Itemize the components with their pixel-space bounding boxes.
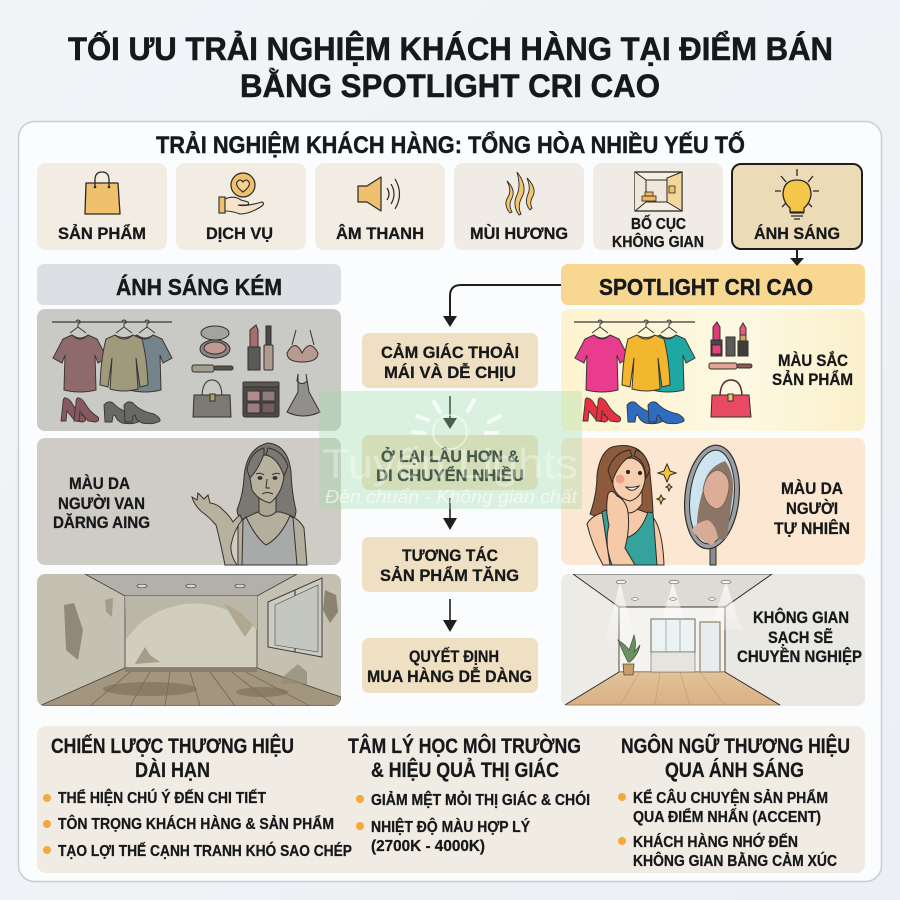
arrow: step 1 to 2	[443, 396, 457, 429]
illustration: tired woman	[192, 443, 307, 565]
tile: scent: MÙI HƯƠNG	[470, 224, 568, 243]
column: brand language: KHÁCH HÀNG NHỚ ĐẾN	[633, 832, 798, 851]
watermark: Tuyến Lights	[322, 440, 578, 487]
column: long-term brand strategy: CHIẾN LƯỢC THƯƠNG HIỆU	[51, 734, 294, 758]
flow step 1: CẢM GIÁC THOẢI	[381, 343, 519, 362]
tile: lighting (selected): ÁNH SÁNG	[754, 224, 840, 243]
tile: product	[37, 163, 167, 250]
column: environmental psychology	[348, 734, 590, 855]
tile: sound	[315, 163, 445, 250]
flow step 4: QUYẾT ĐỊNH	[409, 647, 499, 666]
panel: poor light products	[37, 309, 341, 431]
heading: customer experience: TRẢI NGHIỆM KHÁCH HÀNG: TỔNG HÒA NHIỀU YẾU TỐ	[156, 130, 745, 159]
tile: layout: KHÔNG GIAN	[612, 233, 704, 251]
tile: service: DỊCH VỤ	[206, 224, 273, 243]
column: environmental psychology: & HIỆU QUẢ THỊ GIÁC	[371, 758, 559, 782]
column: brand language: KHÔNG GIAN BẰNG CẢM XÚC	[633, 851, 837, 870]
arrow: lighting to spotlight	[790, 250, 804, 266]
flow step 2	[362, 435, 538, 490]
tile: scent	[454, 163, 584, 250]
panel: vivid products	[561, 309, 865, 431]
column: long-term brand strategy: THỂ HIỆN CHÚ Ý ĐẾN CHI TIẾT	[58, 788, 266, 807]
flow step 4	[362, 638, 538, 693]
panel: clean room	[561, 574, 865, 706]
tile: service	[176, 163, 306, 250]
title	[68, 31, 833, 104]
arrow: spotlight to flow	[443, 285, 561, 327]
column: long-term brand strategy: DÀI HẠN	[135, 759, 210, 782]
watermark: Đèn chuẩn - Không gian chất	[325, 487, 578, 507]
flow step 3: TƯƠNG TÁC	[402, 546, 498, 565]
flow step 4: MUA HÀNG DỄ DÀNG	[367, 667, 532, 686]
panel: stained room	[37, 574, 341, 707]
flow step 2: Ở LẠI LÂU HƠN &	[381, 447, 519, 466]
column: environmental psychology: NHIỆT ĐỘ MÀU HỢP LÝ	[371, 817, 530, 836]
flow step 1	[362, 333, 538, 388]
column: long-term brand strategy	[43, 734, 352, 860]
column: environmental psychology: GIẢM MỆT MỎI THỊ GIÁC & CHÓI	[371, 790, 590, 809]
column: brand language: NGÔN NGỮ THƯƠNG HIỆU	[621, 734, 850, 758]
panel: clean room: KHÔNG GIAN	[753, 608, 849, 627]
panel: natural skin: TỰ NHIÊN	[774, 519, 850, 538]
header: high CRI spotlight	[561, 264, 865, 305]
flow step 3: SẢN PHẨM TĂNG	[380, 566, 519, 585]
tile: lighting (selected)	[732, 164, 862, 249]
column: brand language	[618, 734, 850, 870]
tile: sound: ÂM THANH	[336, 224, 424, 243]
title: TỐI ƯU TRẢI NGHIỆM KHÁCH HÀNG TẠI ĐIỂM BÁN	[68, 31, 833, 67]
panel: dull skin: NGƯỜI VAN	[58, 494, 145, 513]
tile: layout: BỐ CỤC	[631, 215, 686, 233]
flow step 1: MÁI VÀ DỄ CHỊU	[384, 363, 516, 382]
column: long-term brand strategy: TÔN TRỌNG KHÁCH HÀNG & SẢN PHẨM	[58, 814, 334, 833]
title: BẰNG SPOTLIGHT CRI CAO	[240, 68, 660, 104]
panel: vivid products: MÀU SẮC	[778, 351, 848, 370]
arrow: step 3 to 4	[443, 599, 457, 632]
header: poor light: ÁNH SÁNG KÉM	[116, 273, 282, 300]
flow step 3	[362, 537, 538, 592]
column: environmental psychology: (2700K - 4000K)	[371, 838, 485, 855]
panel: dull skin: DĂRNG AING	[53, 513, 150, 532]
panel: vivid products: SẢN PHẨM	[772, 370, 853, 389]
column: brand language: KỂ CÂU CHUYỆN SẢN PHẨM	[633, 788, 828, 807]
panel: dull skin: MÀU DA	[69, 474, 130, 493]
header: poor light	[37, 264, 341, 305]
column: brand language: QUA ĐIỂM NHẤN (ACCENT)	[633, 807, 821, 826]
panel: natural skin	[561, 438, 865, 565]
panel: dull skin	[37, 438, 341, 565]
cosmetics vivid	[709, 322, 752, 417]
panel: natural skin: NGƯỜI	[786, 499, 838, 518]
panel: clean room: SẠCH SẼ	[768, 627, 833, 647]
flow step 2: DI CHUYỂN NHIỀU	[376, 466, 524, 485]
watermark	[319, 391, 582, 509]
tile: product: SẢN PHẨM	[58, 224, 146, 243]
illustration: smiling woman with mirror	[587, 442, 744, 565]
cosmetics	[192, 325, 320, 417]
column: long-term brand strategy: TẠO LỢI THẾ CẠNH TRANH KHÓ SAO CHÉP	[58, 841, 352, 860]
panel: strategy notes	[37, 726, 865, 873]
panel: natural skin: MÀU DA	[781, 479, 843, 498]
arrow: step 2 to 3	[443, 498, 457, 530]
panel: clean room: CHUYỀN NGHIỆP	[737, 647, 862, 666]
tile: layout	[593, 163, 723, 251]
column: environmental psychology: TÂM LÝ HỌC MÔI TRƯỜNG	[348, 734, 581, 758]
column: brand language: QUA ÁNH SÁNG	[665, 759, 804, 782]
header: high CRI spotlight: SPOTLIGHT CRI CAO	[599, 274, 813, 300]
